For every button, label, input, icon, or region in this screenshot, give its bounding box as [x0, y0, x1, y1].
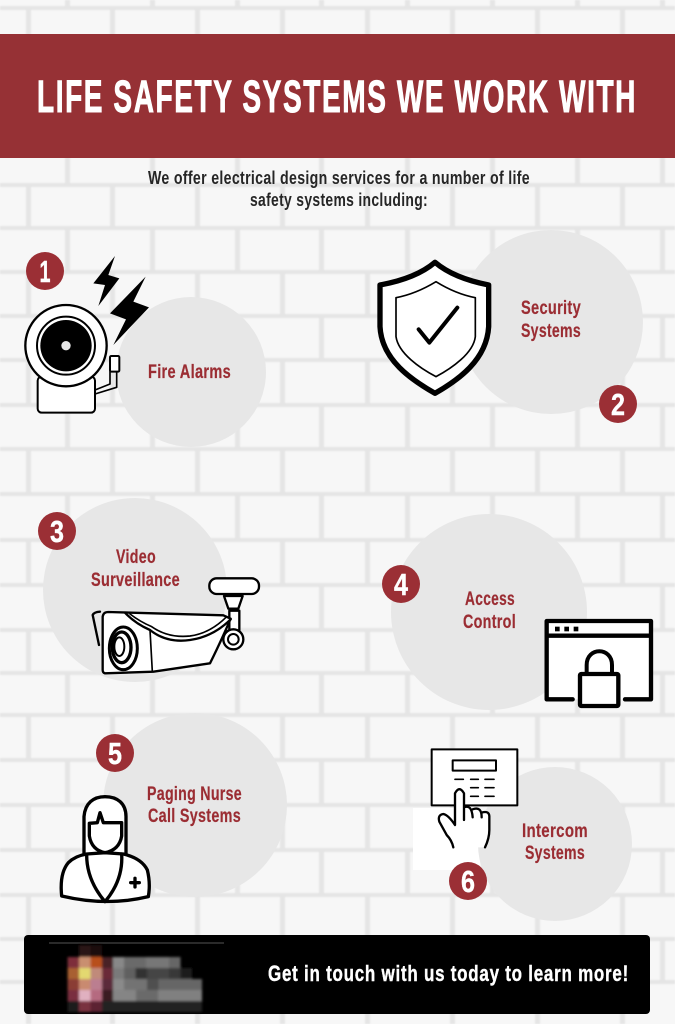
number badge 5 — [96, 734, 134, 772]
label: intercom systems: Intercom — [522, 821, 588, 842]
panel: paging nurse call systems — [61, 713, 287, 902]
icon: shield with check — [380, 262, 489, 393]
number badge 6 — [449, 862, 487, 900]
icon: keypad with pointing hand — [432, 749, 517, 847]
label: access control: Control — [463, 612, 516, 633]
number badge 6: 6 — [461, 864, 475, 899]
label: intercom systems — [522, 821, 588, 864]
number badge 1 — [26, 252, 64, 290]
intro text: We offer electrical design services for a number of life — [148, 168, 530, 188]
panel: security systems — [380, 230, 643, 423]
title banner — [0, 34, 675, 158]
blurred logo — [68, 945, 202, 1012]
number badge 1: 1 — [40, 254, 50, 289]
label: paging nurse call systems: Paging Nurse — [147, 784, 242, 805]
panel: video surveillance — [38, 498, 259, 682]
label: paging nurse call systems: Call Systems — [148, 806, 241, 827]
panel: access control — [382, 514, 651, 710]
label: fire alarms: Fire Alarms — [148, 362, 231, 383]
panel: intercom systems — [413, 749, 632, 921]
icon: nurse — [61, 797, 149, 902]
footer bar — [24, 935, 650, 1014]
label: paging nurse call systems — [147, 784, 242, 827]
intro text — [148, 168, 530, 210]
label: video surveillance: Video — [116, 547, 156, 568]
number badge 3: 3 — [50, 514, 64, 549]
panel: fire alarms — [25, 252, 266, 447]
number badge 2: 2 — [611, 387, 625, 422]
label: access control: Access — [465, 589, 515, 610]
label: intercom systems: Systems — [525, 843, 585, 864]
icon: security camera — [93, 578, 259, 673]
label: access control — [463, 589, 516, 633]
label: video surveillance: Surveillance — [91, 570, 180, 591]
number badge 5: 5 — [108, 736, 122, 771]
number badge 4: 4 — [394, 567, 409, 602]
icon: fire alarm bell — [25, 256, 149, 413]
number badge 2 — [599, 385, 637, 423]
number badge 4 — [382, 565, 420, 603]
icon: browser window with padlock — [547, 621, 651, 706]
label: security systems — [521, 298, 581, 342]
intro text: safety systems including: — [250, 190, 428, 210]
label: security systems: Systems — [521, 321, 581, 342]
label: video surveillance — [91, 547, 180, 591]
number badge 3 — [38, 512, 76, 550]
label: security systems: Security — [521, 298, 581, 319]
